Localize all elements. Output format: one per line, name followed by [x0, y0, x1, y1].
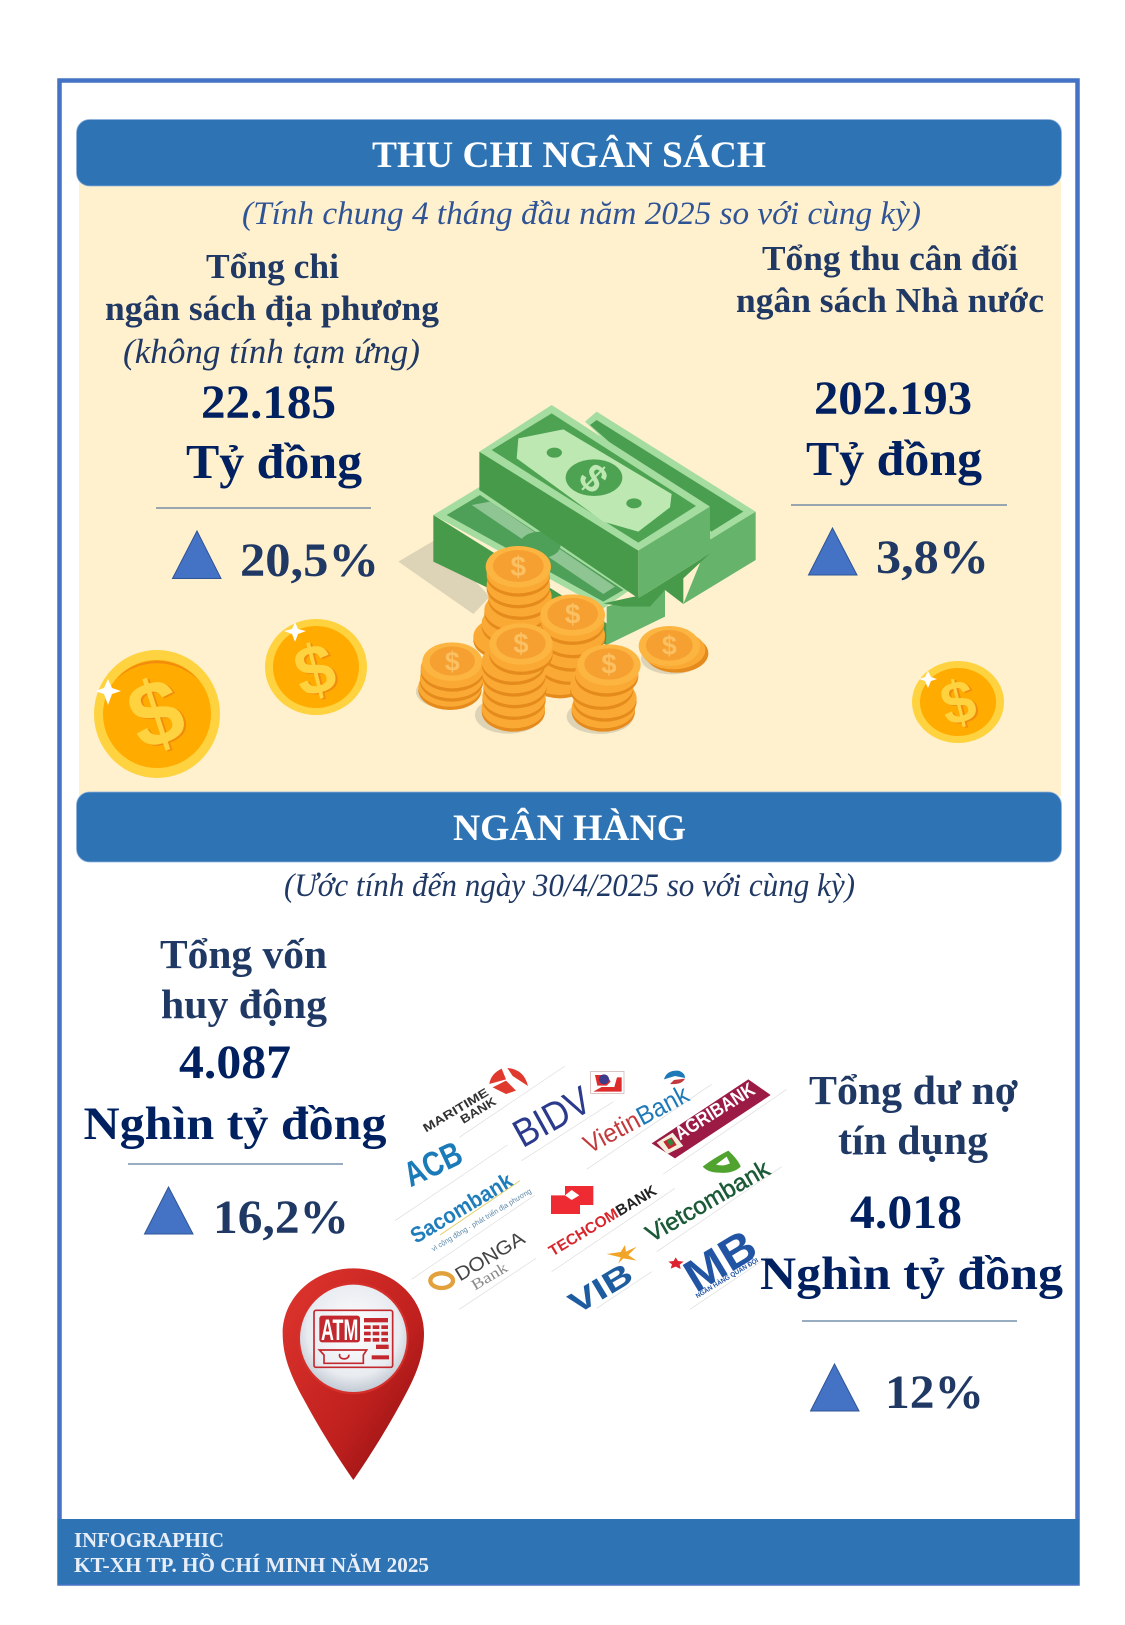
- icon: large coin: [94, 650, 220, 778]
- top bill stack: $: [570, 455, 617, 502]
- cream background: [79, 180, 1061, 796]
- stat: tong du no: tín dụng: [838, 1117, 988, 1163]
- icon: atm location pin: ATM: [321, 1314, 358, 1347]
- logo: agribank: [652, 1079, 787, 1174]
- heading: ngan hang: [76, 792, 1062, 862]
- stat: tong von huy dong: 4.087: [179, 1036, 291, 1089]
- subtitle: (Ước tính đến ngày 30/4/2025 so với cùng kỳ): [284, 868, 855, 904]
- panel: ngan hang: [76, 792, 1064, 1480]
- footer: [58, 1519, 1080, 1584]
- logo: mb bank: NGÂN HÀNG QUÂN ĐỘI: [694, 1255, 760, 1300]
- logo: bidv: BIDV: [506, 1078, 599, 1156]
- logo: sacombank: vì cộng đồng · phát triển địa phương: [430, 1186, 533, 1253]
- coin stack front center: [482, 623, 553, 732]
- coin stack back: $: [511, 551, 527, 582]
- panel: thu chi ngan sach: [76, 120, 1062, 796]
- icon: small coin: $: [936, 667, 985, 740]
- logo: donga bank: DONGA: [452, 1228, 529, 1286]
- stat: tong von huy dong: huy động: [161, 981, 327, 1027]
- logo: vietinbank: VietinBank: [578, 1078, 695, 1159]
- stat: tong thu: Tỷ đồng: [806, 431, 983, 486]
- stat: tong chi: (không tính tạm ứng): [123, 332, 420, 371]
- logo: maritime bank: MARITIME: [420, 1085, 491, 1135]
- coin stack front center: $: [513, 628, 529, 659]
- logo: donga bank: Bank: [468, 1259, 511, 1294]
- stat: tong chi: Tỷ đồng: [186, 434, 363, 489]
- logo: vib: VIB: [563, 1257, 639, 1321]
- icon: atm location pin: [283, 1268, 424, 1480]
- stat: tong du no: 12%: [885, 1366, 984, 1419]
- stat: tong von huy dong: Tổng vốn: [160, 931, 327, 977]
- stat: tong du no: Tổng dư nợ: [809, 1067, 1018, 1113]
- icon: medium coin: $: [286, 627, 343, 712]
- logo: vib: [563, 1245, 652, 1321]
- stat: tong du no: 4.018: [850, 1186, 962, 1239]
- logo: vietcombank: Vietcombank: [641, 1155, 775, 1248]
- logo: acb: [395, 1135, 507, 1221]
- stat: tong chi: 22.185: [201, 376, 336, 429]
- heading: ngan hang: NGÂN HÀNG: [453, 807, 686, 849]
- stat: tong von huy dong: 16,2%: [213, 1191, 349, 1244]
- stat: tong du no: [802, 1067, 1018, 1419]
- stat: tong chi: 20,5%: [240, 534, 379, 587]
- stat: tong thu: 202.193: [814, 372, 972, 425]
- illustration: money and coins: [398, 405, 756, 734]
- stat: tong thu: [736, 239, 1044, 584]
- icon: large coin: $: [118, 659, 198, 771]
- back bill stack: [585, 412, 756, 604]
- logo: agribank: AGRIBANK: [672, 1079, 759, 1145]
- icon: medium coin: $: [289, 628, 345, 713]
- bottom bill stack: [433, 487, 665, 645]
- heading: thu chi ngan sach: [76, 120, 1062, 186]
- ground shadows: [416, 675, 477, 708]
- coin stack front right: $: [601, 649, 617, 680]
- subtitle: (Tính chung 4 tháng đầu năm 2025 so với cùng kỳ): [242, 196, 921, 232]
- bank logos: [395, 1066, 787, 1321]
- logo: sacombank: [406, 1167, 535, 1279]
- coin stack back: [473, 546, 552, 660]
- logo: sacombank: Sacombank: [406, 1167, 518, 1248]
- coin stack center right: [528, 594, 605, 698]
- icon: medium coin: [265, 619, 367, 715]
- coin stack front right: [570, 644, 641, 732]
- top bill stack: [479, 405, 710, 598]
- logo: techcombank: TECHCOMBANK: [546, 1182, 660, 1260]
- coin stack center right: $: [565, 599, 581, 630]
- logo: donga bank: [430, 1228, 536, 1309]
- icon: small coin: $: [934, 666, 982, 739]
- single coins: $: [662, 630, 677, 660]
- logo: mb bank: MB: [675, 1220, 765, 1302]
- coin stack left: [418, 642, 484, 710]
- icon: small coin: [912, 661, 1004, 743]
- stat: tong von huy dong: Nghìn tỷ đồng: [84, 1098, 387, 1150]
- footer: INFOGRAPHIC: [74, 1528, 224, 1552]
- shadow: [398, 540, 490, 614]
- stat: tong chi: Tổng chi: [206, 247, 339, 286]
- stat: tong chi: ngân sách địa phương: [105, 289, 439, 328]
- logo: maritime bank: [420, 1066, 565, 1137]
- icon: large coin: $: [116, 658, 196, 770]
- stat: tong von huy dong: [84, 931, 387, 1244]
- stat value: nghin ty dong right: Nghìn tỷ đồng: [760, 1248, 1064, 1300]
- stat: tong thu: ngân sách Nhà nước: [736, 281, 1044, 320]
- logo: acb: ACB: [398, 1135, 468, 1195]
- single coins: [639, 626, 708, 673]
- heading: thu chi ngan sach: THU CHI NGÂN SÁCH: [372, 134, 766, 176]
- stat: tong thu: Tổng thu cân đối: [762, 239, 1018, 278]
- stat: tong thu: 3,8%: [876, 531, 989, 584]
- stat: tong chi: [105, 247, 439, 587]
- footer: KT-XH TP. HỒ CHÍ MINH NĂM 2025: [74, 1553, 429, 1577]
- logo: maritime bank: BANK: [458, 1094, 499, 1127]
- coin stack left: $: [445, 646, 460, 676]
